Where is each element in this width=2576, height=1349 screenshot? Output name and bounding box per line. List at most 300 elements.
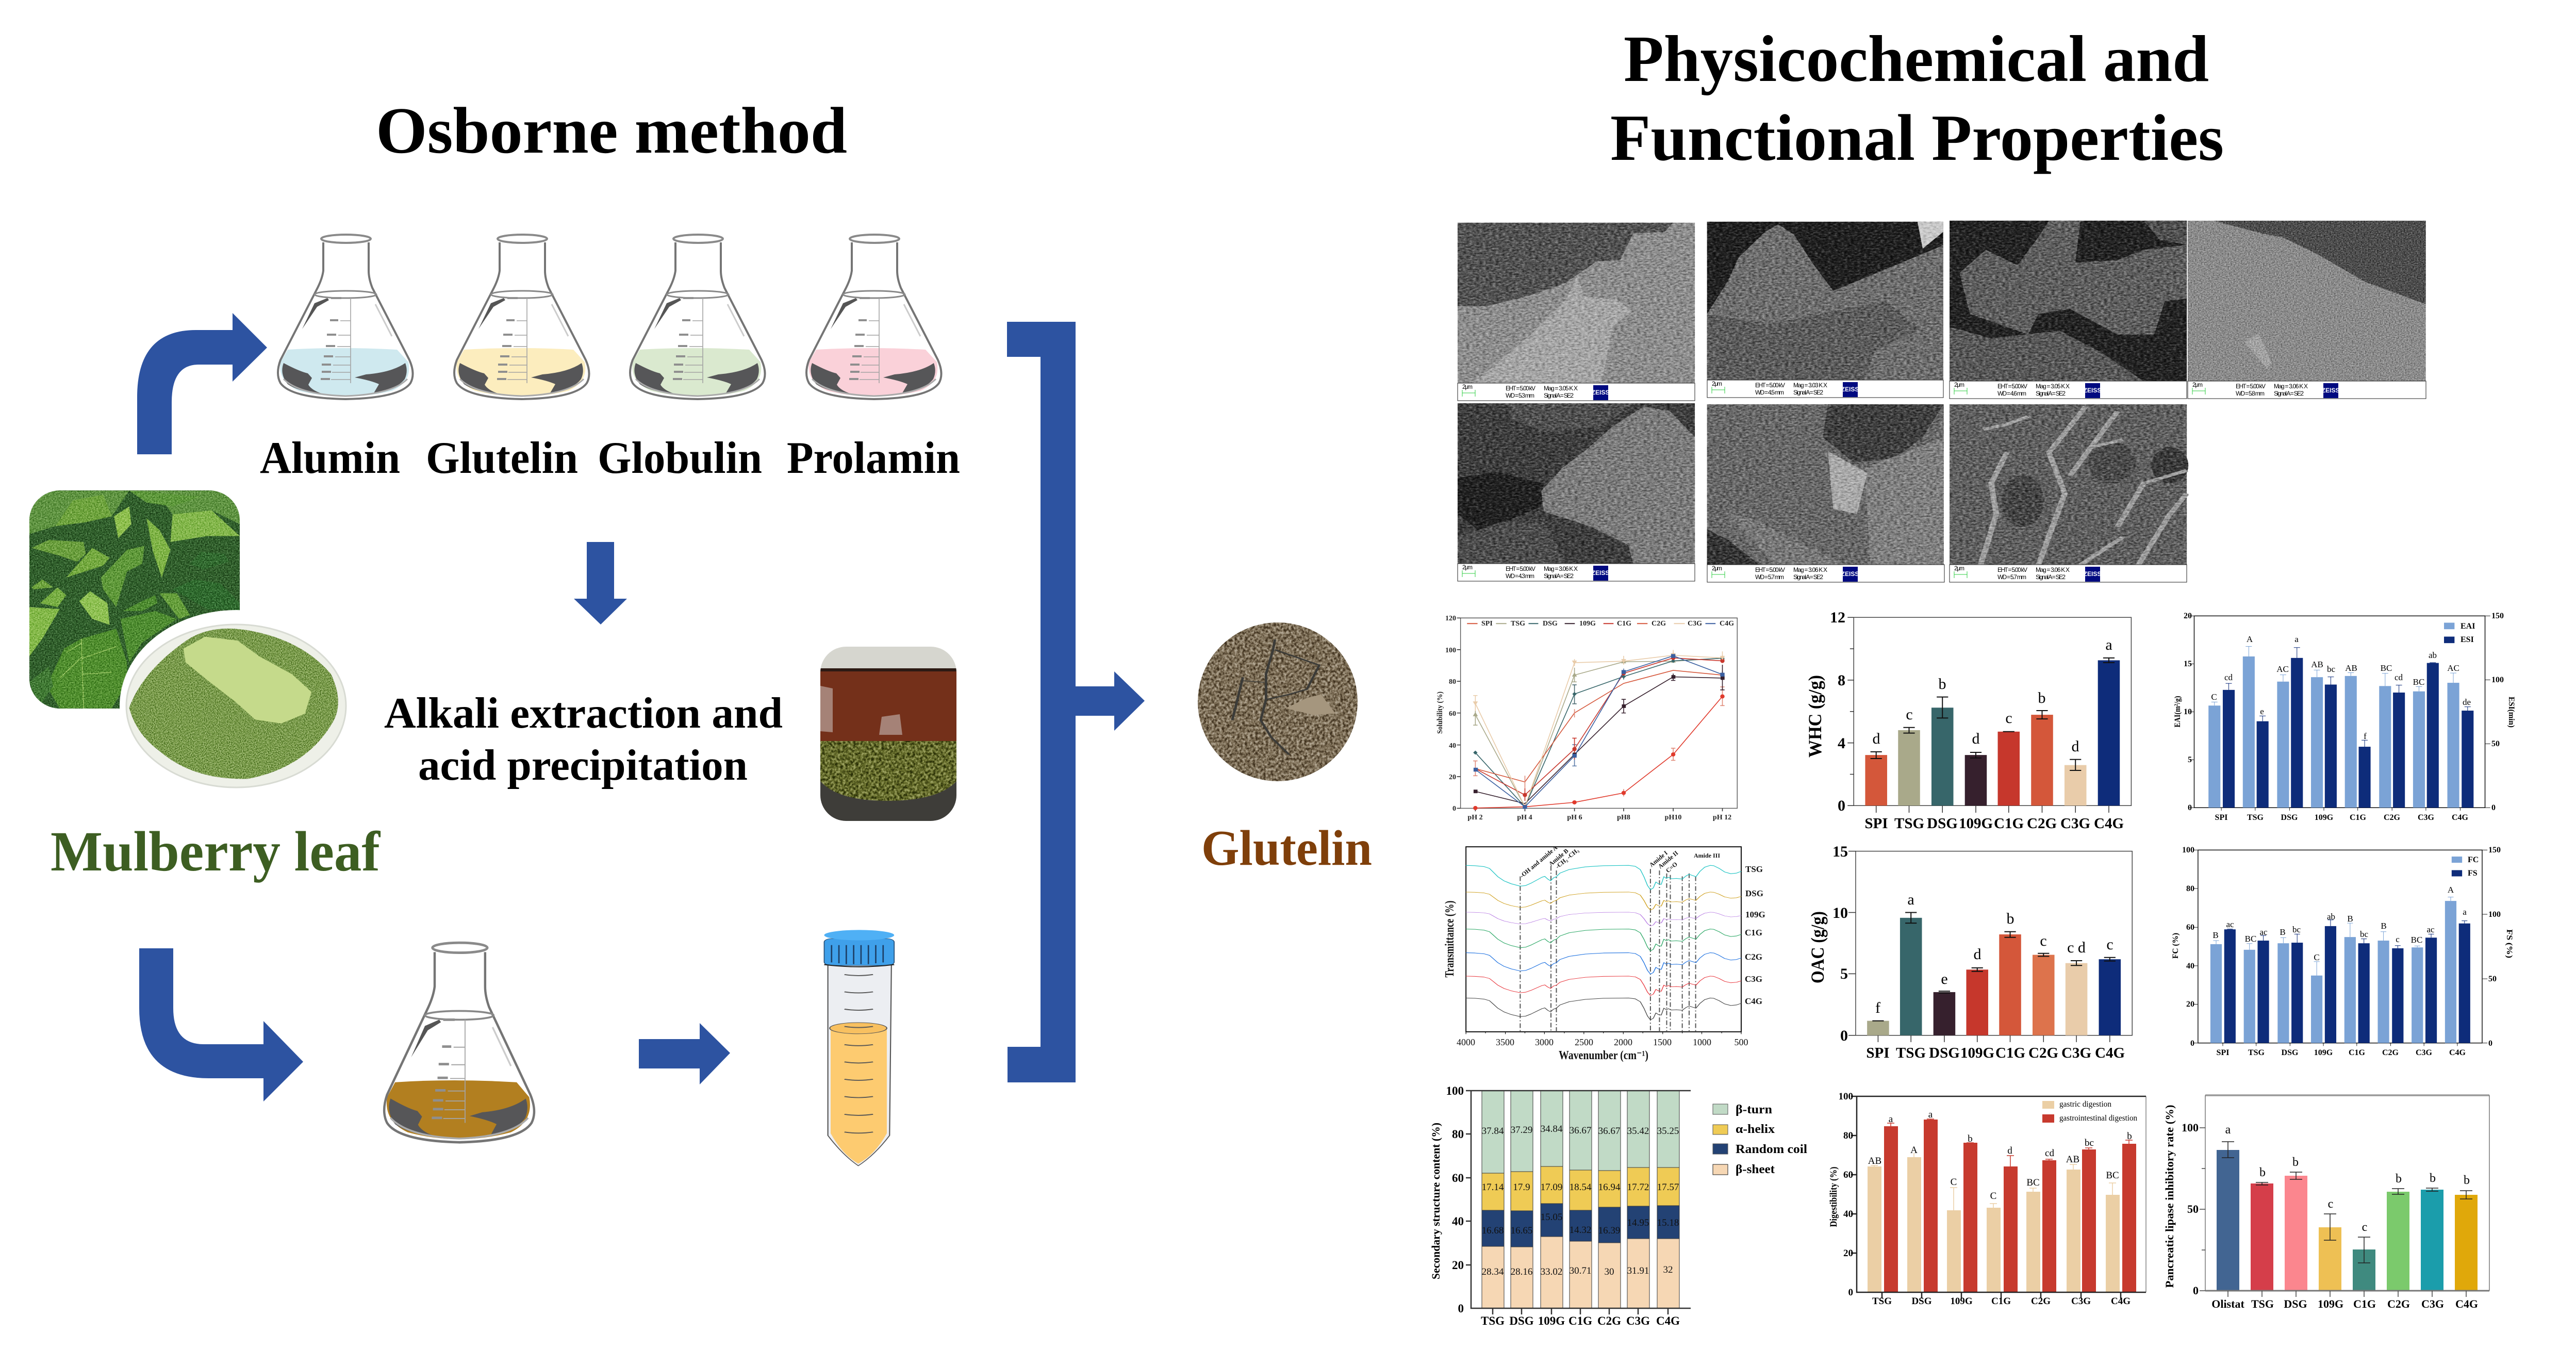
solubility labels: DSG [1543, 620, 1558, 628]
digestibility axis text: 80 [1843, 1130, 1853, 1141]
solubility labels: 120 [1445, 615, 1456, 622]
chart: FC and FS bars: FS (%) [2505, 929, 2514, 958]
chart: EAI and ESI bars: C2G [2384, 813, 2401, 822]
chart: EAI and ESI bars: 109G [2315, 813, 2334, 822]
digestibility letters: BC [2106, 1170, 2119, 1181]
solubility labels: 40 [1449, 742, 1456, 750]
label: Mulberry leaf: Mulberry leaf [51, 820, 381, 883]
stacked axis text: C2G [1597, 1314, 1621, 1327]
FC/FS text: BC [2411, 935, 2422, 945]
WHC significance letters: b [1939, 676, 1946, 693]
SEM caption 1 [1458, 383, 1695, 401]
stacked legend: Random coil [1736, 1143, 1807, 1156]
SEM caption 3: ZEISS [2084, 387, 2101, 394]
SEM caption 1: 2 µm [1462, 383, 1473, 390]
arrow: bracket joining both routes to glutelin [1007, 322, 1145, 1082]
SEM caption 4: 2 µm [2192, 381, 2203, 388]
FTIR labels: 3500 [1496, 1037, 1514, 1047]
digestibility legend text: gastric digestion [2059, 1100, 2111, 1109]
stacked value labels: 35.42 [1627, 1126, 1649, 1137]
lipase axis text: 100 [2182, 1121, 2199, 1134]
OAC significance letters: d [1974, 946, 1981, 963]
FC/FS text: C [2314, 952, 2320, 962]
lipase axis text: 50 [2187, 1203, 2199, 1215]
chart: FC and FS bars: TSG [2248, 1048, 2265, 1057]
OAC text: 10 [1832, 904, 1848, 922]
OAC text: C1G [1995, 1045, 2025, 1061]
FTIR labels: 4000 [1457, 1037, 1475, 1047]
digestibility axes [1851, 1096, 2146, 1298]
arrow: curved up to flasks [137, 313, 267, 454]
lipase letters: c [2362, 1221, 2367, 1234]
stacked value labels: 36.67 [1570, 1125, 1591, 1136]
chart: FC and FS bars: C1G [2349, 1048, 2366, 1057]
FTIR labels: 2500 [1575, 1037, 1593, 1047]
digestibility letters: bc [2085, 1138, 2094, 1148]
SEM caption 6 [1707, 565, 1944, 582]
FTIR labels: 1000 [1693, 1037, 1711, 1047]
solubility labels: 20 [1449, 774, 1456, 781]
SEM caption 5 [1458, 564, 1695, 581]
lipase letters [2225, 1123, 2470, 1234]
stacked value labels: 16.68 [1482, 1225, 1504, 1236]
FC/FS text: B [2347, 914, 2353, 924]
WHC text: TSG [1894, 815, 1924, 832]
flask labels: Alumin [260, 433, 400, 483]
arrow: flask to tube [639, 1023, 730, 1084]
chart: EAI and ESI bars: EAI [2461, 622, 2475, 631]
solubility labels: 100 [1445, 647, 1456, 654]
stacked axis text: C1G [1568, 1314, 1592, 1327]
OAC text: C3G [2061, 1045, 2091, 1061]
chart: EAI and ESI bars [2173, 612, 2516, 822]
FTIR labels: Amide II [1657, 849, 1680, 870]
arrow: down [574, 542, 627, 624]
SEM caption 7: WD = 5.7 mm [1997, 573, 2026, 581]
SEM image 4 [2188, 221, 2426, 381]
OAC text: C4G [2095, 1045, 2125, 1061]
heading: Physicochemical and Functional Properties: Physicochemical and [1624, 22, 2209, 95]
WHC significance letters: b [2038, 689, 2046, 706]
lipase axes [2205, 1094, 2489, 1096]
OAC significance letters: c [2040, 932, 2047, 949]
flask: albumin [278, 235, 413, 399]
stacked value labels: 30.71 [1570, 1265, 1591, 1276]
stacked axis text: C3G [1626, 1314, 1650, 1327]
solubility labels: 60 [1449, 710, 1456, 718]
FTIR labels: 1500 [1653, 1037, 1672, 1047]
OAC text [1807, 843, 2125, 1061]
SEM caption 1: WD = 5.3 mm [1506, 392, 1534, 399]
WHC text: SPI [1864, 815, 1888, 832]
EAI/ESI text: AB [2311, 660, 2323, 669]
EAI/ESI text: AB [2345, 663, 2357, 673]
photo: alkali extraction jar [820, 647, 956, 821]
stacked axis text: 80 [1452, 1128, 1464, 1141]
chart: FC and FS bars: 150 [2488, 846, 2501, 854]
digestibility axis text [1828, 1091, 2131, 1307]
FC/FS text: B [2212, 930, 2219, 940]
digestibility axis text: C3G [2071, 1296, 2091, 1307]
solubility labels [1436, 615, 1734, 821]
OAC text: C2G [2028, 1045, 2058, 1061]
WHC text: 8 [1838, 672, 1845, 689]
FTIR curves and guide lines [1466, 847, 1741, 1034]
flask: precipitate [384, 943, 534, 1142]
SEM caption 7: EHT = 5.00 kV [1997, 566, 2027, 573]
stacked value labels: 16.39 [1598, 1225, 1620, 1236]
FC/FS text: ac [2226, 919, 2234, 929]
WHC significance letters: d [2072, 738, 2079, 755]
chart: EAI and ESI bars: DSG [2281, 813, 2298, 822]
stacked value labels: 15.18 [1657, 1218, 1679, 1228]
solubility labels: pH10 [1665, 814, 1681, 821]
FTIR labels: Amide I [1648, 849, 1669, 868]
WHC text: DSG [1927, 815, 1958, 832]
digestibility bars [1868, 1101, 2136, 1292]
FTIR labels: DSG [1745, 889, 1763, 898]
flask: prolamin [806, 235, 942, 399]
OAC bars and axes [1848, 851, 2132, 1042]
FTIR labels: C3G [1745, 974, 1762, 984]
chart: digestibility bars [1828, 1091, 2146, 1307]
digestibility axis text: DSG [1911, 1296, 1932, 1307]
stacked value labels: 37.84 [1482, 1126, 1504, 1137]
EAI/ESI text: AC [2447, 663, 2459, 673]
WHC text: 109G [1959, 815, 1993, 832]
SEM caption 4: EHT = 5.00 kV [2236, 383, 2266, 390]
stacked value labels: 16.94 [1598, 1182, 1621, 1193]
lipase axis text: Pancreatic lipase inhibitory rate (%) [2163, 1105, 2176, 1288]
FTIR labels [1443, 844, 1765, 1062]
SEM caption 2: Mag = 3.03 K X [1793, 382, 1827, 389]
WHC significance letters: c [2005, 710, 2012, 727]
chart: EAI and ESI bars: 5 [2188, 755, 2192, 764]
digestibility legend text [2059, 1100, 2137, 1123]
solubility labels: pH 4 [1517, 814, 1532, 821]
stacked value labels: 17.72 [1627, 1182, 1649, 1193]
WHC text: C4G [2094, 815, 2124, 832]
chart: FC and FS bars: 0 [2488, 1039, 2492, 1048]
OAC significance letters [1875, 891, 2113, 1016]
stacked value labels: 33.02 [1541, 1266, 1562, 1277]
WHC text: C1G [1994, 815, 2024, 832]
chart: FC and FS bars: C2G [2382, 1048, 2399, 1057]
SEM caption 7: Signal A = SE2 [2036, 573, 2066, 581]
SEM caption 7: ZEISS [2084, 570, 2101, 578]
digestibility axis text: C1G [1991, 1296, 2011, 1307]
chart: EAI and ESI bars: C4G [2452, 813, 2469, 822]
stacked value labels: 34.84 [1541, 1124, 1563, 1134]
stacked axis text: 100 [1446, 1084, 1464, 1097]
EAI/ESI text: C [2211, 692, 2217, 702]
stacked axis text: 0 [1458, 1302, 1464, 1315]
stacked value labels: 35.25 [1657, 1126, 1679, 1137]
OAC text: SPI [1866, 1045, 1890, 1061]
FTIR labels: Amide B [1547, 847, 1570, 867]
chart: FC and FS bars: FC [2468, 856, 2479, 864]
chart: EAI and ESI bars: ESI(min) [2507, 697, 2516, 728]
stacked value labels: 15.05 [1541, 1212, 1562, 1223]
FC/FS text: BC [2245, 934, 2256, 944]
EAI/ESI text: cd [2395, 672, 2403, 682]
stacked legend: α-helix [1736, 1123, 1775, 1136]
solubility plot lines [1457, 618, 1737, 811]
lipase letters: b [2292, 1156, 2299, 1169]
flask labels: Prolamin [787, 433, 960, 483]
EAI/ESI text: BC [2413, 677, 2424, 687]
photo: mulberry leaves [21, 485, 240, 710]
SEM caption 7 [1950, 565, 2187, 582]
EAI/ESI text: cd [2224, 672, 2233, 682]
stacked legend: β-turn [1736, 1103, 1772, 1116]
chart: EAI and ESI bars: ESI [2461, 635, 2474, 644]
stacked bars [1482, 1091, 1679, 1308]
chart: FC and FS bars: SPI [2217, 1048, 2229, 1057]
FTIR labels: 2000 [1614, 1037, 1632, 1047]
WHC significance letters: a [2105, 636, 2112, 653]
stacked value labels: 17.9 [1513, 1182, 1530, 1193]
WHC text: 0 [1838, 797, 1845, 814]
stacked value labels: 36.67 [1598, 1126, 1620, 1137]
lipase axis text: TSG [2251, 1297, 2274, 1310]
stacked legend: β-sheet [1736, 1163, 1775, 1176]
chart: FC and FS bars: 20 [2186, 1000, 2194, 1009]
arrow: curved down to flask [139, 948, 303, 1101]
FTIR labels: Amide III [1694, 852, 1720, 859]
OAC text: TSG [1896, 1045, 1926, 1061]
WHC significance letters [1873, 636, 2112, 755]
digestibility letters: C [1951, 1177, 1957, 1188]
chart: FC and FS bars: FS [2468, 869, 2478, 878]
SEM caption 1: Signal A = SE2 [1544, 392, 1574, 399]
FTIR labels: Wavenumber (cm⁻¹) [1559, 1049, 1648, 1062]
SEM caption 6: 2 µm [1712, 565, 1722, 572]
EAI/ESI text: A [2247, 634, 2253, 644]
chart: EAI and ESI bars: 0 [2188, 803, 2192, 812]
chart: FTIR spectra [1443, 844, 1765, 1062]
SEM caption 6: Mag = 3.06 K X [1793, 566, 1827, 573]
SEM caption 5: Mag = 3.06 K X [1544, 565, 1578, 572]
digestibility letters [1868, 1109, 2132, 1202]
WHC text: 4 [1838, 735, 1845, 752]
lipase axis text: Olistat [2211, 1297, 2244, 1310]
OAC significance letters: b [2007, 910, 2014, 927]
stacked value labels: 17.09 [1541, 1182, 1562, 1193]
EAI/ESI text: e [2260, 706, 2264, 716]
FC/FS text: a [2463, 907, 2467, 917]
stacked value labels: 14.32 [1570, 1225, 1591, 1236]
lipase bars [2217, 1142, 2478, 1291]
FTIR labels: Transmittance (%) [1443, 900, 1457, 978]
FC/FS text: B [2381, 921, 2387, 931]
digestibility letters: AB [1868, 1156, 1881, 1166]
chart: FC and FS bars: 109G [2314, 1048, 2333, 1057]
lipase axis text: C2G [2387, 1297, 2410, 1310]
chart: FC and FS bars: 40 [2186, 962, 2194, 970]
digestibility axis text: 60 [1843, 1170, 1853, 1180]
flask labels [260, 433, 960, 483]
lipase axis text: C3G [2421, 1297, 2444, 1310]
stacked axis text: 109G [1538, 1314, 1565, 1327]
stacked value labels: 31.91 [1627, 1265, 1649, 1276]
digestibility axis text: 0 [1848, 1287, 1853, 1298]
stacked value labels: 28.16 [1511, 1266, 1532, 1277]
stacked value labels: 14.95 [1627, 1218, 1649, 1228]
SEM caption 2: WD = 4.5 mm [1755, 389, 1784, 396]
SEM caption 4: WD = 5.8 mm [2236, 390, 2265, 397]
lipase axis text: 0 [2193, 1284, 2199, 1297]
heading: Osborne method: Osborne method [376, 94, 847, 167]
FC/FS text: A [2448, 885, 2454, 895]
digestibility axis text: TSG [1872, 1296, 1892, 1307]
solubility labels: pH8 [1617, 814, 1630, 821]
FTIR labels: C=O [1664, 861, 1679, 874]
EAI/ESI text: de [2463, 697, 2471, 707]
flask labels: Glutelin [426, 433, 578, 483]
FTIR labels: -OH and amide A [1518, 844, 1559, 879]
lipase axis text [2163, 1105, 2478, 1310]
digestibility letters: d [2007, 1145, 2012, 1156]
SEM caption 1: Mag = 3.05 K X [1544, 385, 1578, 392]
EAI/ESI text: f [2364, 731, 2367, 741]
FC/FS text: bc [2360, 929, 2368, 939]
chart: EAI and ESI bars: EAI(m²/g) [2173, 696, 2182, 727]
FC/FS text: B [2280, 927, 2286, 937]
flask: glutelin [454, 235, 589, 399]
heading: Physicochemical and Functional Properties [1610, 22, 2224, 174]
EAI/ESI text: bc [2327, 664, 2335, 674]
stacked value labels: 32 [1663, 1264, 1673, 1275]
stacked value labels: 37.29 [1511, 1125, 1532, 1136]
chart: EAI and ESI bars: 10 [2184, 708, 2192, 716]
chart: OAC bars [1807, 843, 2132, 1061]
stacked legend [1713, 1103, 1807, 1176]
EAI/ESI text: AC [2276, 664, 2289, 674]
FTIR labels: C4G [1745, 996, 1762, 1006]
stacked axis text: 20 [1452, 1259, 1464, 1272]
OAC text: 5 [1840, 965, 1848, 982]
stacked value labels: 17.57 [1657, 1182, 1679, 1193]
chart: FC and FS bars: DSG [2282, 1048, 2299, 1057]
photo: mulberry leaf powder in dish [120, 610, 353, 802]
chart: pancreatic lipase inhibition bars [2163, 1095, 2489, 1310]
FTIR labels: C2G [1745, 952, 1762, 962]
WHC text: C2G [2027, 815, 2057, 832]
lipase letters: b [2259, 1166, 2266, 1179]
flask labels: Globulin [598, 433, 762, 483]
solubility labels: C1G [1617, 620, 1631, 628]
text: Alkali extraction and acid precipitation [384, 689, 783, 789]
WHC text: C3G [2060, 815, 2090, 832]
solubility labels: pH 6 [1567, 814, 1582, 821]
chart: FC and FS bars: 100 [2182, 846, 2194, 854]
solubility labels: 0 [1452, 805, 1456, 813]
stacked axis text: Secondary structure content (%) [1429, 1123, 1442, 1279]
stacked value labels: 16.65 [1511, 1225, 1532, 1236]
SEM caption 1: EHT = 5.00 kV [1506, 385, 1535, 392]
heading: Physicochemical and Functional Properties: Functional Properties [1610, 101, 2224, 174]
solubility labels: pH 12 [1713, 814, 1731, 821]
OAC text: DSG [1929, 1045, 1960, 1061]
lipase axis text: C4G [2455, 1297, 2478, 1310]
EAI/ESI text: BC [2381, 663, 2392, 673]
SEM caption 4: ZEISS [2322, 387, 2339, 394]
chart: FC and FS bars: 50 [2488, 975, 2497, 983]
FTIR labels: 3000 [1535, 1037, 1554, 1047]
OAC text: OAC (g/g) [1807, 911, 1828, 983]
stacked value labels: 17.14 [1482, 1182, 1504, 1193]
FC/FS text [2212, 885, 2467, 962]
digestibility letters: C [1990, 1191, 1996, 1202]
chart: FC and FS bars: 80 [2186, 884, 2194, 893]
SEM caption 5: WD = 4.3 mm [1506, 572, 1534, 580]
FC/FS bars and axes [2193, 850, 2487, 1046]
text: Alkali extraction and acid precipitation: acid precipitation [418, 741, 748, 789]
EAI/ESI text: ab [2429, 650, 2437, 660]
SEM caption 1: ZEISS [1592, 389, 1609, 396]
chart: secondary structure stacked bars [1429, 1084, 1807, 1327]
chart: FC and FS bars [2171, 846, 2514, 1057]
text: Alkali extraction and acid precipitation: Alkali extraction and [384, 689, 783, 737]
lipase letters: b [2430, 1172, 2436, 1185]
chart: FC and FS bars: 100 [2488, 910, 2501, 919]
lipase letters: b [2464, 1174, 2470, 1187]
stacked axis text: DSG [1509, 1314, 1534, 1327]
SEM caption 3: Signal A = SE2 [2036, 390, 2066, 397]
chart: FC and FS bars: C4G [2449, 1048, 2466, 1057]
FC/FS text: bc [2292, 925, 2301, 934]
lipase axis text: C1G [2353, 1297, 2376, 1310]
OAC significance letters: e [1941, 970, 1948, 988]
digestibility letters: a [1928, 1109, 1933, 1120]
FTIR labels: 109G [1745, 910, 1765, 919]
lipase axis text: 109G [2318, 1297, 2343, 1310]
FTIR labels: -CH₂ -CH₃ [1554, 846, 1580, 870]
SEM caption 3: Mag = 3.05 K X [2036, 383, 2070, 390]
SEM images [1458, 221, 2188, 565]
SEM caption 2: ZEISS [1841, 386, 1859, 393]
FC/FS text: ac [2426, 925, 2435, 934]
chart: EAI and ESI bars: SPI [2215, 813, 2227, 822]
SEM caption 6: Signal A = SE2 [1793, 573, 1823, 581]
OAC text: 0 [1840, 1027, 1848, 1044]
SEM caption 5: EHT = 5.00 kV [1506, 565, 1535, 572]
OAC text: 15 [1832, 843, 1848, 860]
SEM caption 5: ZEISS [1592, 569, 1609, 577]
stacked axis text: 40 [1452, 1215, 1464, 1228]
WHC text: WHC (g/g) [1805, 675, 1825, 758]
flask: globulin [630, 235, 765, 399]
SEM caption 3 [1950, 381, 2187, 399]
FTIR labels: 500 [1735, 1037, 1748, 1047]
chart: FC and FS bars: 0 [2190, 1039, 2194, 1048]
panel: SEM micrographs [1458, 221, 2426, 582]
solubility labels: 80 [1449, 678, 1456, 686]
chart: FC and FS bars: FC (%) [2171, 933, 2180, 959]
solubility labels: TSG [1511, 620, 1525, 628]
digestibility axis text: 20 [1843, 1248, 1853, 1259]
digestibility axis text: C2G [2031, 1296, 2051, 1307]
photo: glutelin disc [1198, 622, 1358, 781]
OAC significance letters: c d [2067, 939, 2086, 956]
chart: EAI and ESI bars: 20 [2184, 612, 2192, 620]
digestibility letters: A [1910, 1145, 1918, 1156]
chart: EAI and ESI bars: C1G [2350, 813, 2367, 822]
SEM caption 4: Mag = 3.06 K X [2274, 383, 2308, 390]
FTIR labels: TSG [1745, 864, 1763, 874]
digestibility letters: b [1968, 1133, 1973, 1144]
